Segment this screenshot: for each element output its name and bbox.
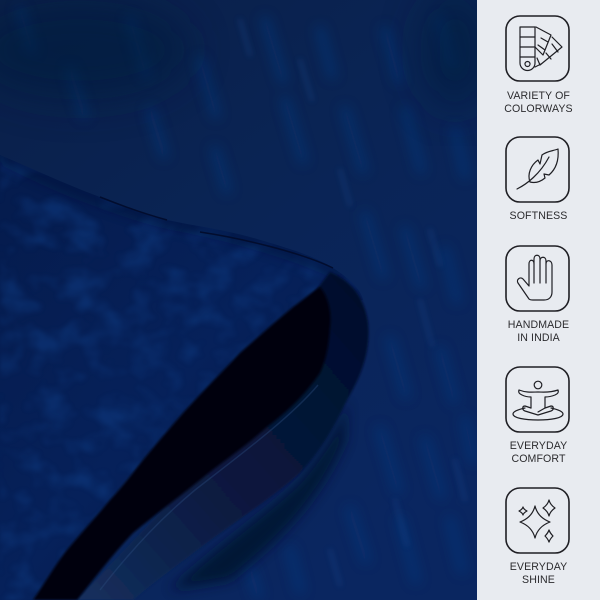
label: variety of colorways: COLORWAYS	[504, 103, 573, 115]
label: variety of colorways	[504, 90, 573, 115]
label: everyday comfort: EVERYDAY	[510, 440, 567, 452]
icon: meditating figure	[505, 366, 570, 433]
photo: rolled navy blue rug	[0, 0, 477, 600]
icon: colour swatch fan	[505, 15, 570, 82]
frayed edge highlight	[100, 385, 318, 590]
label: everyday shine	[510, 561, 567, 586]
rug edge band	[77, 272, 369, 600]
panel: features sidebar	[477, 0, 600, 600]
label: softness: SOFTNESS	[510, 210, 567, 222]
label: everyday comfort	[510, 440, 567, 465]
icon: feather	[505, 136, 570, 203]
label: everyday comfort: COMFORT	[511, 453, 566, 465]
rolled rug top face	[0, 140, 370, 600]
shadow beneath roll	[170, 400, 347, 590]
dark hollow of the roll	[33, 287, 331, 600]
label: handmade in india	[508, 319, 569, 344]
label: everyday shine: SHINE	[522, 574, 555, 586]
icon: raised hand	[505, 245, 570, 312]
rug top edge seam	[100, 197, 333, 268]
label: handmade in india: HANDMADE	[508, 319, 569, 331]
icon: sparkles	[505, 487, 570, 554]
label: variety of colorways: VARIETY OF	[507, 90, 570, 102]
label: everyday shine: EVERYDAY	[510, 561, 567, 573]
label: handmade in india: IN INDIA	[517, 332, 560, 344]
